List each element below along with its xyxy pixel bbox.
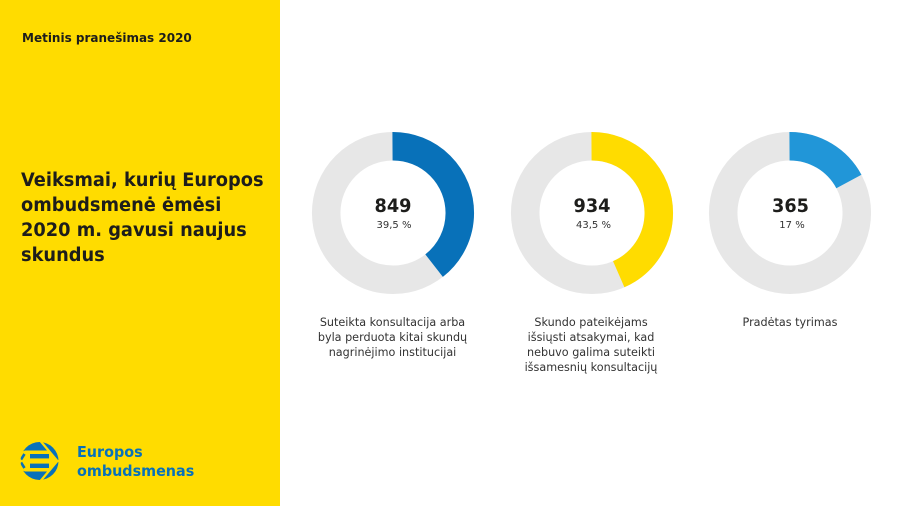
- caption: replies sent: išsamesnių konsultacijų: [525, 361, 657, 374]
- chart: donut 934: 934: [573, 195, 610, 217]
- logo wordmark: Europos: [77, 442, 143, 460]
- caption: replies sent: išsiųsti atsakymai, kad: [528, 331, 654, 344]
- heading: [21, 170, 264, 266]
- chart: donut 365: 17 %: [779, 220, 805, 231]
- chart: donut 934: 43,5 %: [576, 220, 610, 231]
- caption: replies sent: [525, 316, 658, 374]
- caption: replies sent: Skundo pateikėjams: [534, 316, 648, 329]
- caption: advice or transfer: byla perduota kitai skundų: [318, 331, 467, 344]
- chart: donut 849: 39,5 %: [377, 220, 411, 231]
- caption: inquiry opened: Pradėtas tyrimas: [743, 316, 837, 329]
- logo wordmark: ombudsmenas: [77, 462, 194, 480]
- heading: 2020 m. gavusi naujus: [21, 220, 247, 241]
- caption: advice or transfer: [318, 316, 467, 359]
- chart: donut 849: [312, 132, 474, 294]
- logo wordmark: [77, 442, 194, 480]
- report label: Metinis pranešimas 2020: [22, 30, 192, 45]
- heading: skundus: [21, 245, 105, 266]
- heading: ombudsmenė ėmėsi: [21, 195, 221, 216]
- icon: European Ombudsman logo: [20, 442, 58, 480]
- panel: yellow sidebar: [0, 0, 280, 506]
- heading: Veiksmai, kurių Europos: [21, 170, 264, 190]
- caption: advice or transfer: Suteikta konsultacija arba: [320, 316, 465, 329]
- caption: replies sent: nebuvo galima suteikti: [527, 346, 655, 359]
- chart: donut 849: 849: [374, 195, 412, 217]
- chart: donut 365: 365: [772, 195, 809, 217]
- chart: donut 365: [709, 132, 871, 294]
- caption: advice or transfer: nagrinėjimo institucijai: [329, 346, 456, 359]
- chart: donut 934: [511, 132, 674, 294]
